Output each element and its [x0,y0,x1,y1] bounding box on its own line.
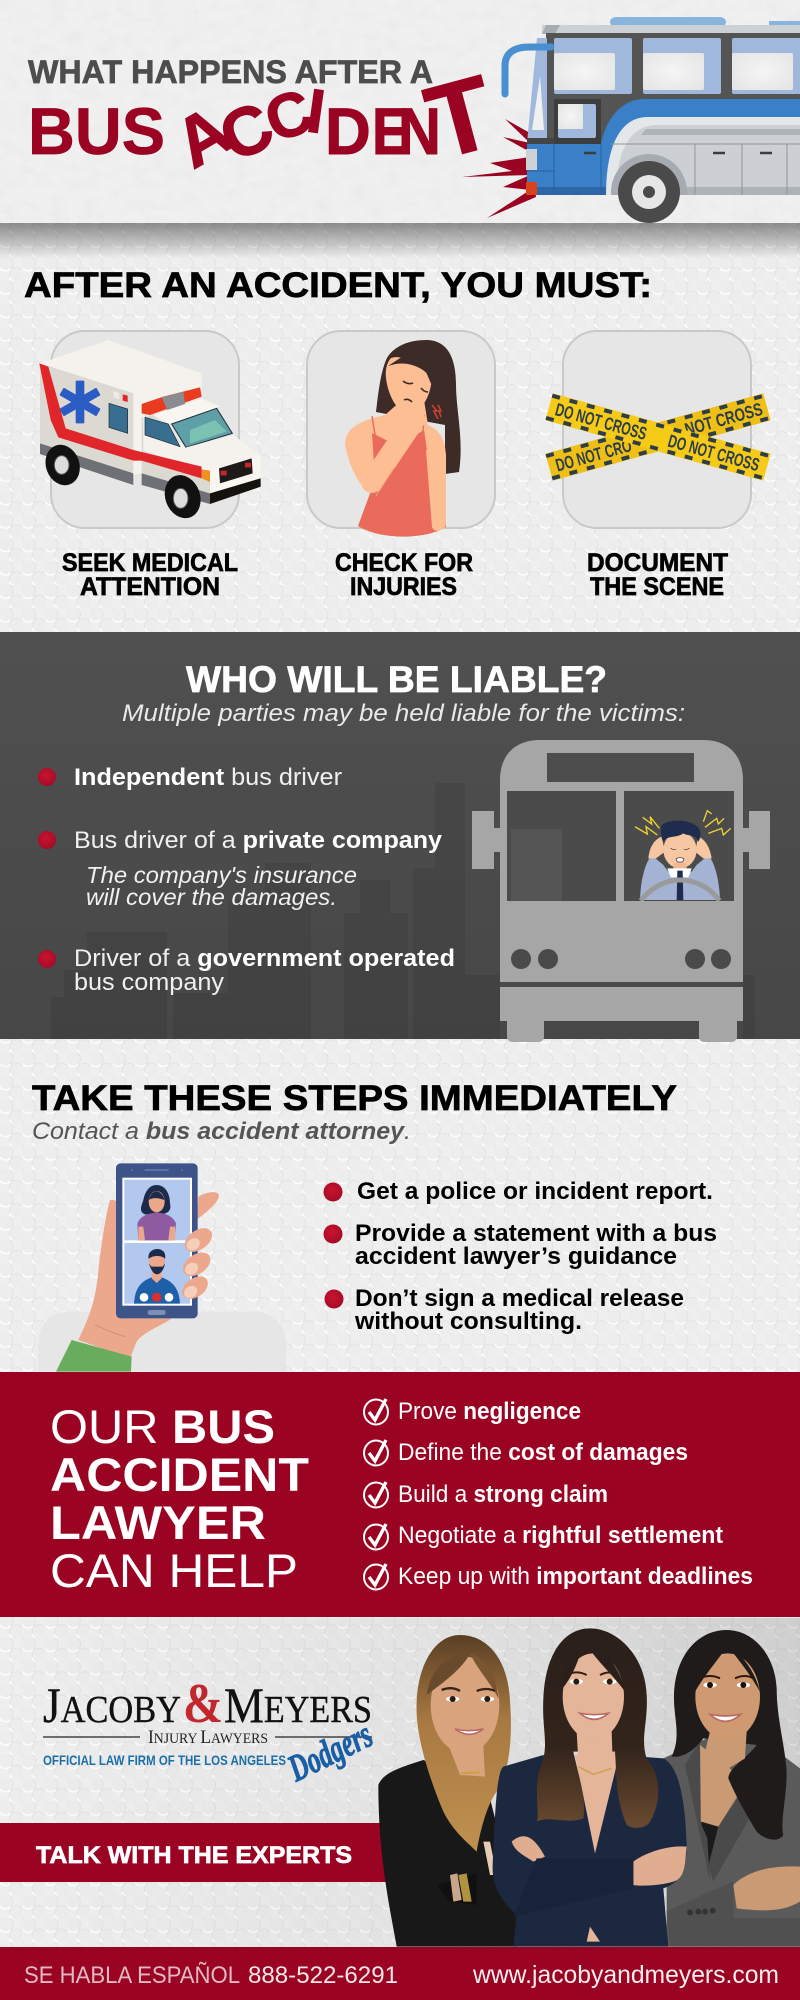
step: police report: Get a police or incident report. [357,1178,713,1205]
list item: government [38,945,455,996]
icon: ambulance [39,340,261,523]
subtitle: contact attorney: Contact a bus accident attorney . [32,1118,411,1145]
text: website: www.jacobyandmeyers.com [472,1961,779,1989]
panel: who will be liable [0,632,800,1042]
heading: our bus accident lawyer can help: LAWYER [50,1496,266,1549]
list item: government: bus company [74,969,224,996]
logo: jacoby and meyers [43,1673,379,1790]
step: provide statement: Provide a statement with a bus [355,1220,717,1247]
logo: jacoby and meyers: & [183,1673,223,1735]
logo: dodgers script: Dodgers [281,1714,379,1790]
icon: police tape: DO NOT CRO [553,435,634,475]
icon: blue bus [505,17,800,230]
list item: private company: Bus driver of a private company [74,827,443,854]
icon: police tape: DO NOT CROSS [553,400,649,444]
panel: header [0,0,800,259]
step: medical release: Don’t sign a medical release [355,1285,684,1312]
panel: footer [0,1618,800,2000]
label: check for injuries: CHECK FOR [335,549,473,577]
item: cost of damages: Define the cost of damages [398,1439,688,1466]
panel: our lawyer can help [0,1372,800,1617]
subtitle: Multiple parties may be held liable for the victims: [122,700,685,727]
step: provide statement: accident lawyer’s guidance [355,1243,677,1270]
heading: accident: C [256,76,322,156]
heading: after an accident: AFTER AN ACCIDENT, YOU MUST: [24,266,652,305]
card: document the scene [545,331,771,601]
skyline silhouette [51,783,755,1039]
panel: after an accident [24,266,771,601]
label: document the scene: DOCUMENT [587,549,728,577]
heading: accident: C [208,87,285,177]
bar: contact details [0,1947,800,2000]
heading: our bus accident lawyer can help: ACCIDENT [50,1448,309,1501]
heading: accident [162,54,506,183]
label: document the scene: THE SCENE [590,573,724,601]
photo: three attorneys [378,1628,800,1947]
banner: talk with the experts [0,1823,400,1882]
list: how the lawyer helps [364,1398,753,1590]
middle attorney [493,1628,687,1947]
text: se habla espanol: SE HABLA ESPAÑOL [24,1962,240,1989]
icon: police tape: NOT CROSS [682,399,765,440]
icon: stressed driver [635,811,731,901]
item: strong claim: Build a strong claim [398,1481,608,1508]
logo: jacoby and meyers: OFFICIAL LAW FIRM OF THE LOS ANGELES [43,1752,286,1768]
label: seek medical attention: ATTENTION [80,573,220,601]
heading: our bus accident lawyer can help [50,1400,309,1597]
heading: accident: D [325,94,371,168]
list item: government: Driver of a government operated [74,945,455,972]
step: medical release: without consulting. [354,1308,582,1335]
label: seek medical attention: SEEK MEDICAL [62,549,238,577]
icon: crash burst [462,119,536,218]
banner: talk with the experts: TALK WITH THE EXPERTS [36,1842,352,1869]
list item: private company [38,827,443,910]
heading: take these steps: TAKE THESE STEPS IMMEDIATELY [32,1079,677,1118]
right attorney [663,1630,800,1947]
heading: what happens after a: WHAT HAPPENS AFTER A [28,54,433,90]
logo: jacoby and meyers: INJURY LAWYERS [148,1727,268,1748]
card: check for injuries [307,331,495,601]
panel: take these steps [32,1079,717,1372]
card: seek medical attention [39,331,261,601]
item: prove negligence: Prove negligence [398,1398,581,1425]
list item: independent: Independent bus driver [74,764,342,791]
logo: jacoby and meyers: JACOBY [43,1677,181,1733]
heading: our bus accident lawyer can help: CAN HELP [50,1544,298,1597]
heading: our bus accident lawyer can help: OUR BUS [50,1400,275,1453]
heading: accident: A [162,90,244,183]
heading: accident: E [372,95,410,169]
label: check for injuries: INJURIES [350,573,457,601]
heading: bus: BUS [28,94,165,168]
note: insurance: will cover the damages. [86,884,337,910]
logo: jacoby and meyers: MEYERS [224,1677,372,1733]
item: important deadlines: Keep up with important deadlines [398,1563,753,1590]
note: insurance: The company's insurance [86,862,357,888]
text: phone number: 888-522-6291 [248,1962,398,1989]
heading: accident: N [398,95,441,169]
icon: woman with neck pain [345,340,461,537]
heading: accident: I [303,77,329,147]
left attorney [378,1635,517,1947]
icon: phone in hand [38,1163,286,1372]
icon: bus front [472,740,770,1042]
heading: accident: T [415,54,506,182]
item: rightful settlement: Negotiate a rightful settlement [398,1522,723,1549]
heading: who will be liable: WHO WILL BE LIABLE? [186,659,607,700]
list: steps [324,1178,717,1335]
icon: police tape [545,393,771,481]
